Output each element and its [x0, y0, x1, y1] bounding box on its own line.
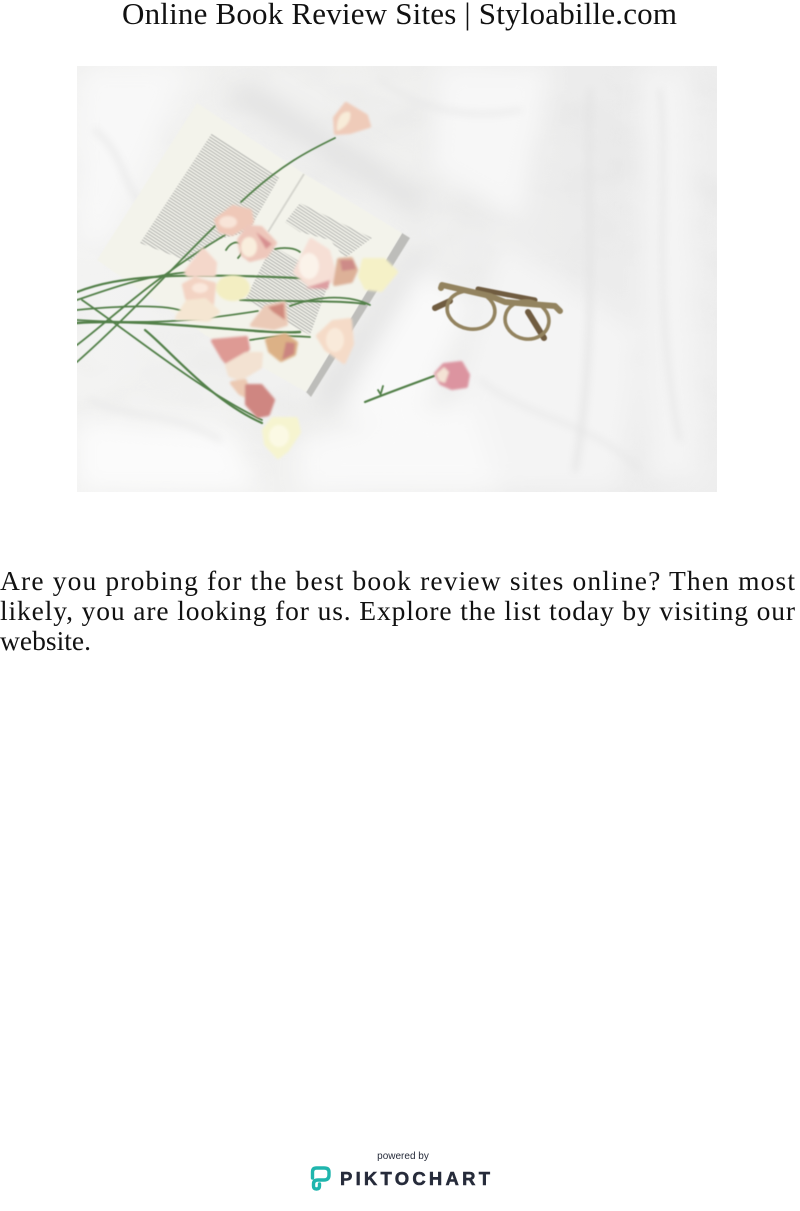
flower: top [335, 104, 369, 133]
intro text [0, 565, 795, 656]
linen texture [77, 66, 717, 492]
photo: book, flowers and glasses on white linen [77, 66, 717, 492]
flower: mid pink [252, 303, 286, 328]
flower: yellow bottom [264, 419, 299, 457]
icon: Piktochart logo mark [312, 1168, 329, 1189]
Piktochart wordmark: PIKTOCHART [340, 1168, 491, 1189]
flower: lower right [318, 320, 352, 362]
book [113, 134, 410, 397]
right page text [285, 203, 372, 258]
glasses temple arms [435, 301, 450, 308]
book gutter shadow [268, 174, 304, 232]
intro text: Are you probing for the best book review sites online? Then most [0, 565, 795, 596]
flowers [177, 104, 468, 457]
flower: single rose [436, 363, 468, 388]
glasses frame [441, 285, 560, 311]
flower: right large [295, 240, 333, 289]
flower: lower left [213, 338, 261, 379]
intro text: website. [0, 625, 91, 656]
glasses [435, 285, 560, 343]
flower: yellow right [360, 260, 396, 290]
footer: powered by Piktochart [312, 1151, 491, 1189]
flower stems [77, 138, 434, 423]
left page text [140, 133, 279, 262]
flower: deep pink [232, 381, 273, 416]
flower: yellow centre [216, 275, 250, 301]
flower: lower centre [267, 335, 296, 360]
book fore-edge [306, 233, 410, 397]
flower: left cluster [177, 250, 218, 320]
book pages [113, 218, 402, 392]
powered by label: powered by [377, 1151, 429, 1162]
flower: dusty pink [335, 259, 356, 284]
intro text: likely, you are looking for us. Explore the list today by visiting our [0, 595, 795, 626]
flower: upper centre pair [216, 207, 275, 260]
linen folds [77, 66, 700, 492]
